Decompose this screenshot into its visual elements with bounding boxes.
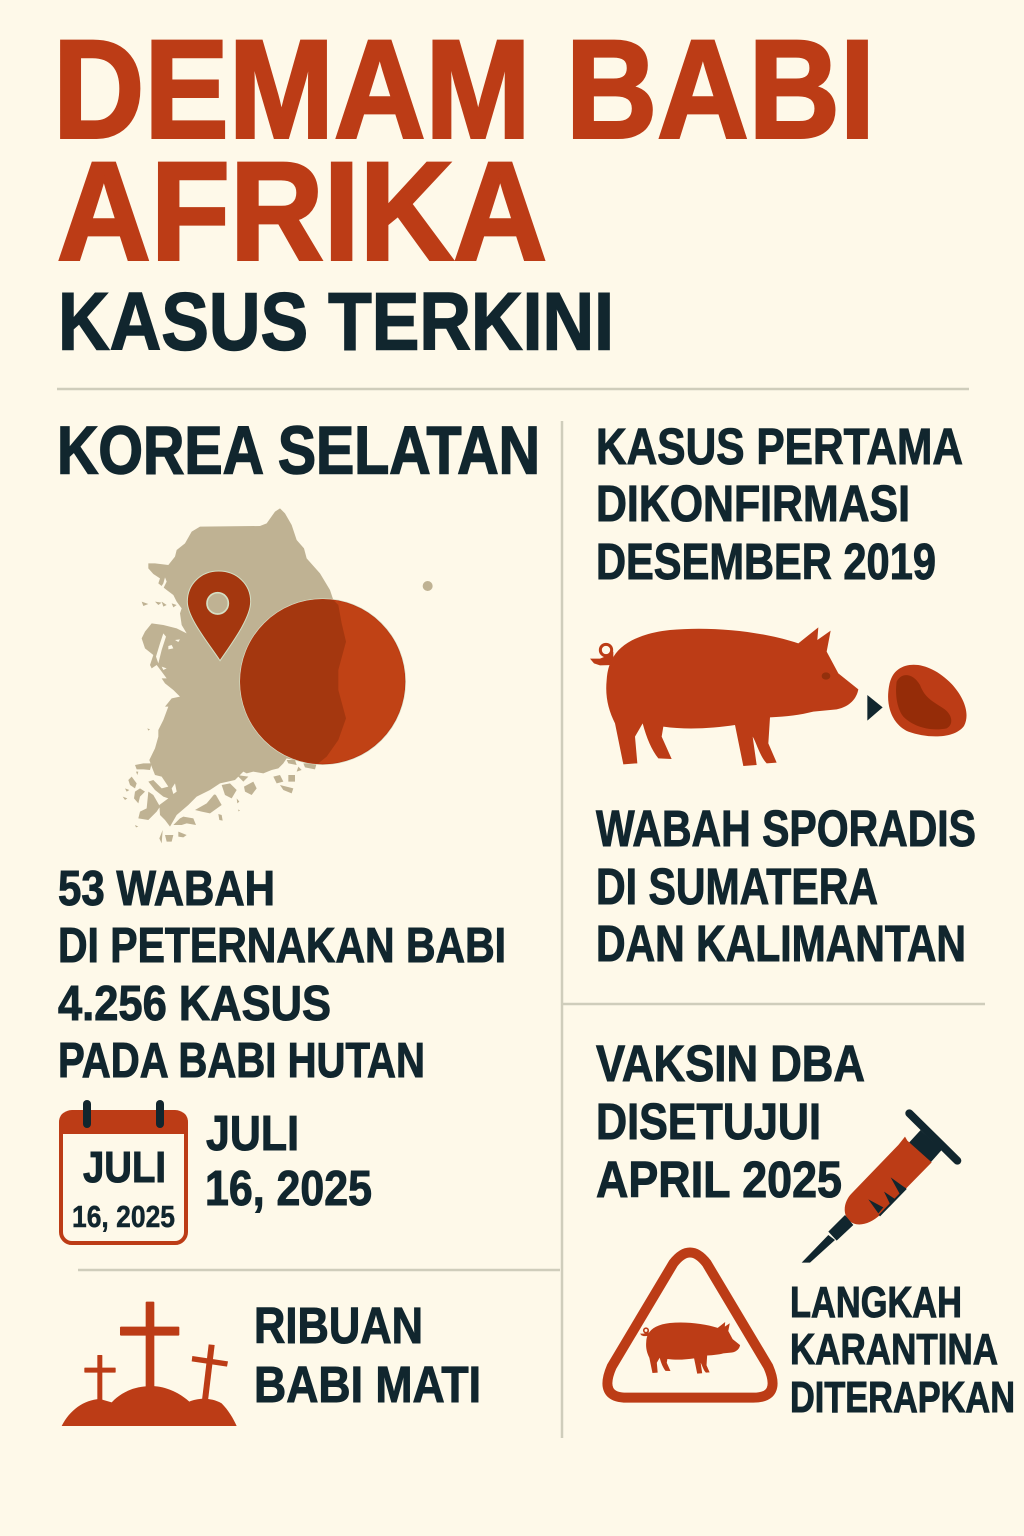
text: vaccine: VAKSIN DBA [596, 1035, 865, 1092]
land mass [123, 508, 346, 843]
text: first case: DESEMBER 2019 [596, 533, 936, 590]
text: first case: DIKONFIRMASI [596, 475, 910, 532]
icon: small pig [640, 1322, 740, 1374]
text: outbreak counts: 53 WABAH [58, 862, 275, 916]
text: quarantine measures [790, 1278, 1015, 1422]
text: date: 16, 2025 [205, 1162, 372, 1216]
text: date: JULI [206, 1107, 299, 1161]
text: date [205, 1107, 372, 1216]
icon: calendar [59, 1100, 188, 1243]
coastal inlets [156, 577, 220, 795]
outbreak circle [239, 598, 406, 765]
location pin [187, 571, 251, 661]
arrow [867, 695, 883, 721]
map: South Korea with location pin and outbreak circle [123, 508, 433, 843]
text: first case [596, 418, 963, 590]
text: sporadic outbreaks [596, 800, 976, 972]
title: DEMAM BABI [53, 10, 875, 168]
text: first case: KASUS PERTAMA [596, 418, 963, 475]
icon: calendar: 16, 2025 [72, 1199, 175, 1234]
island dot [423, 581, 433, 591]
title [53, 10, 875, 290]
subtitle: KASUS TERKINI [58, 276, 614, 368]
text: thousands of dead pigs [254, 1297, 481, 1413]
text: outbreak counts: DI PETERNAKAN BABI [58, 919, 506, 973]
text: outbreak counts: 4.256 KASUS [58, 977, 331, 1031]
pig [590, 627, 858, 766]
text: outbreak counts [58, 862, 506, 1088]
text: thousands of dead pigs: RIBUAN [254, 1297, 423, 1354]
icon: syringe [802, 1113, 957, 1263]
text: thousands of dead pigs: BABI MATI [254, 1356, 481, 1413]
meat [888, 665, 967, 736]
text: vaccine: APRIL 2025 [596, 1151, 842, 1208]
title: AFRIKA [57, 132, 547, 290]
heading: Korea Selatan: KOREA SELATAN [57, 412, 540, 488]
icon: pig with meat [590, 627, 967, 766]
icon: calendar: JULI [83, 1143, 166, 1192]
text: outbreak counts: PADA BABI HUTAN [58, 1034, 425, 1088]
text: vaccine [596, 1035, 865, 1208]
text: sporadic outbreaks: DI SUMATERA [596, 858, 878, 915]
icon: quarantine warning sign [607, 1252, 773, 1398]
text: quarantine measures: LANGKAH [790, 1278, 962, 1327]
icon: graves [62, 1302, 237, 1426]
text: vaccine: DISETUJUI [596, 1093, 821, 1150]
